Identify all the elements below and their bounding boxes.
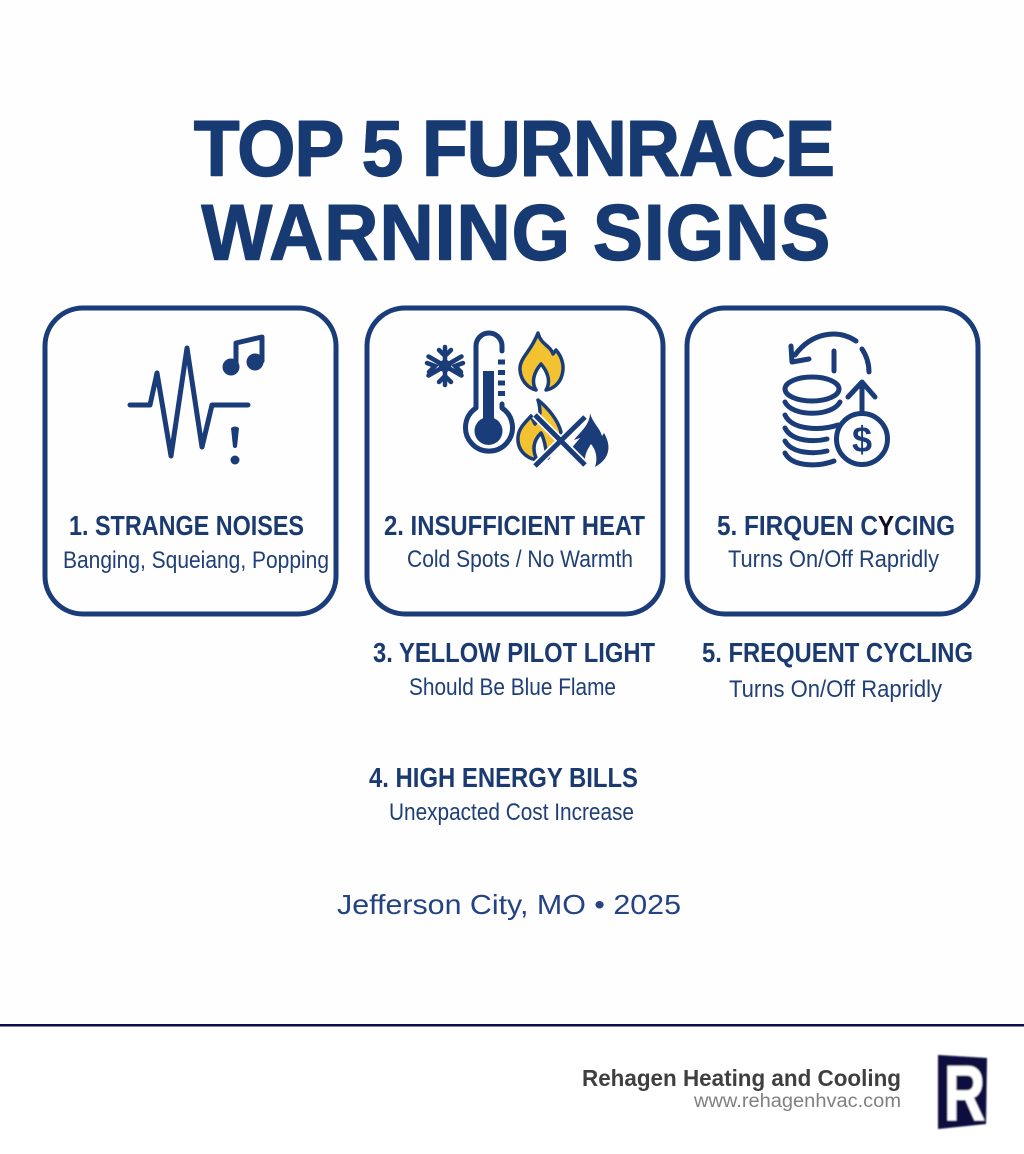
title — [194, 105, 835, 277]
item: high energy bills: Unexpacted Cost Increase — [389, 799, 634, 826]
icon: snowflake — [427, 347, 463, 385]
title: TOP 5 FURNRACE — [194, 105, 835, 193]
label: garbled frequent cycling: Turns On/Off Rapridly — [728, 546, 939, 573]
item: frequent cycling — [702, 637, 973, 703]
label: strange noises: 1. STRANGE NOISES — [69, 510, 304, 541]
logo: R — [944, 1049, 985, 1137]
panel: strange noises — [45, 308, 336, 614]
label: insufficient heat: 2. INSUFFICIENT HEAT — [384, 510, 645, 541]
item: frequent cycling: 5. FREQUENT CYCLING — [702, 637, 973, 668]
icon: crossed-out flames — [518, 400, 608, 467]
item: yellow pilot light: 3. YELLOW PILOT LIGHT — [373, 637, 655, 668]
item: high energy bills — [369, 762, 638, 826]
item: yellow pilot light — [373, 637, 655, 701]
item: yellow pilot light: Should Be Blue Flame — [409, 674, 616, 701]
label: insufficient heat: Cold Spots / No Warmth — [407, 546, 633, 573]
icon: sound wave with music note — [130, 337, 264, 464]
logo — [938, 1049, 987, 1137]
panel: insufficient heat — [367, 308, 663, 614]
icon: coins with cycle arrow and dollar — [785, 334, 888, 465]
label: insufficient heat — [384, 510, 645, 573]
item: high energy bills: 4. HIGH ENERGY BILLS — [369, 762, 638, 793]
website: www.rehagenhvac.com — [693, 1091, 901, 1112]
label: garbled frequent cycling: 5. FIRQUEN CYCING — [717, 510, 955, 541]
label: strange noises — [63, 510, 329, 574]
company name: Rehagen Heating and Cooling — [582, 1065, 901, 1091]
panel: frequent cycling — [687, 308, 978, 614]
icon: thermometer — [465, 333, 512, 451]
label: garbled frequent cycling — [717, 510, 955, 573]
label: strange noises: Banging, Squeiang, Popping — [63, 547, 329, 574]
icon: yellow flame — [520, 333, 563, 390]
title: WARNING SIGNS — [201, 189, 830, 277]
footer — [0, 1024, 1024, 1154]
icon: coins with cycle arrow and dollar: $ — [852, 419, 872, 460]
item: frequent cycling: Turns On/Off Rapridly — [729, 676, 942, 703]
location and year: Jefferson City, MO • 2025 — [337, 889, 681, 920]
